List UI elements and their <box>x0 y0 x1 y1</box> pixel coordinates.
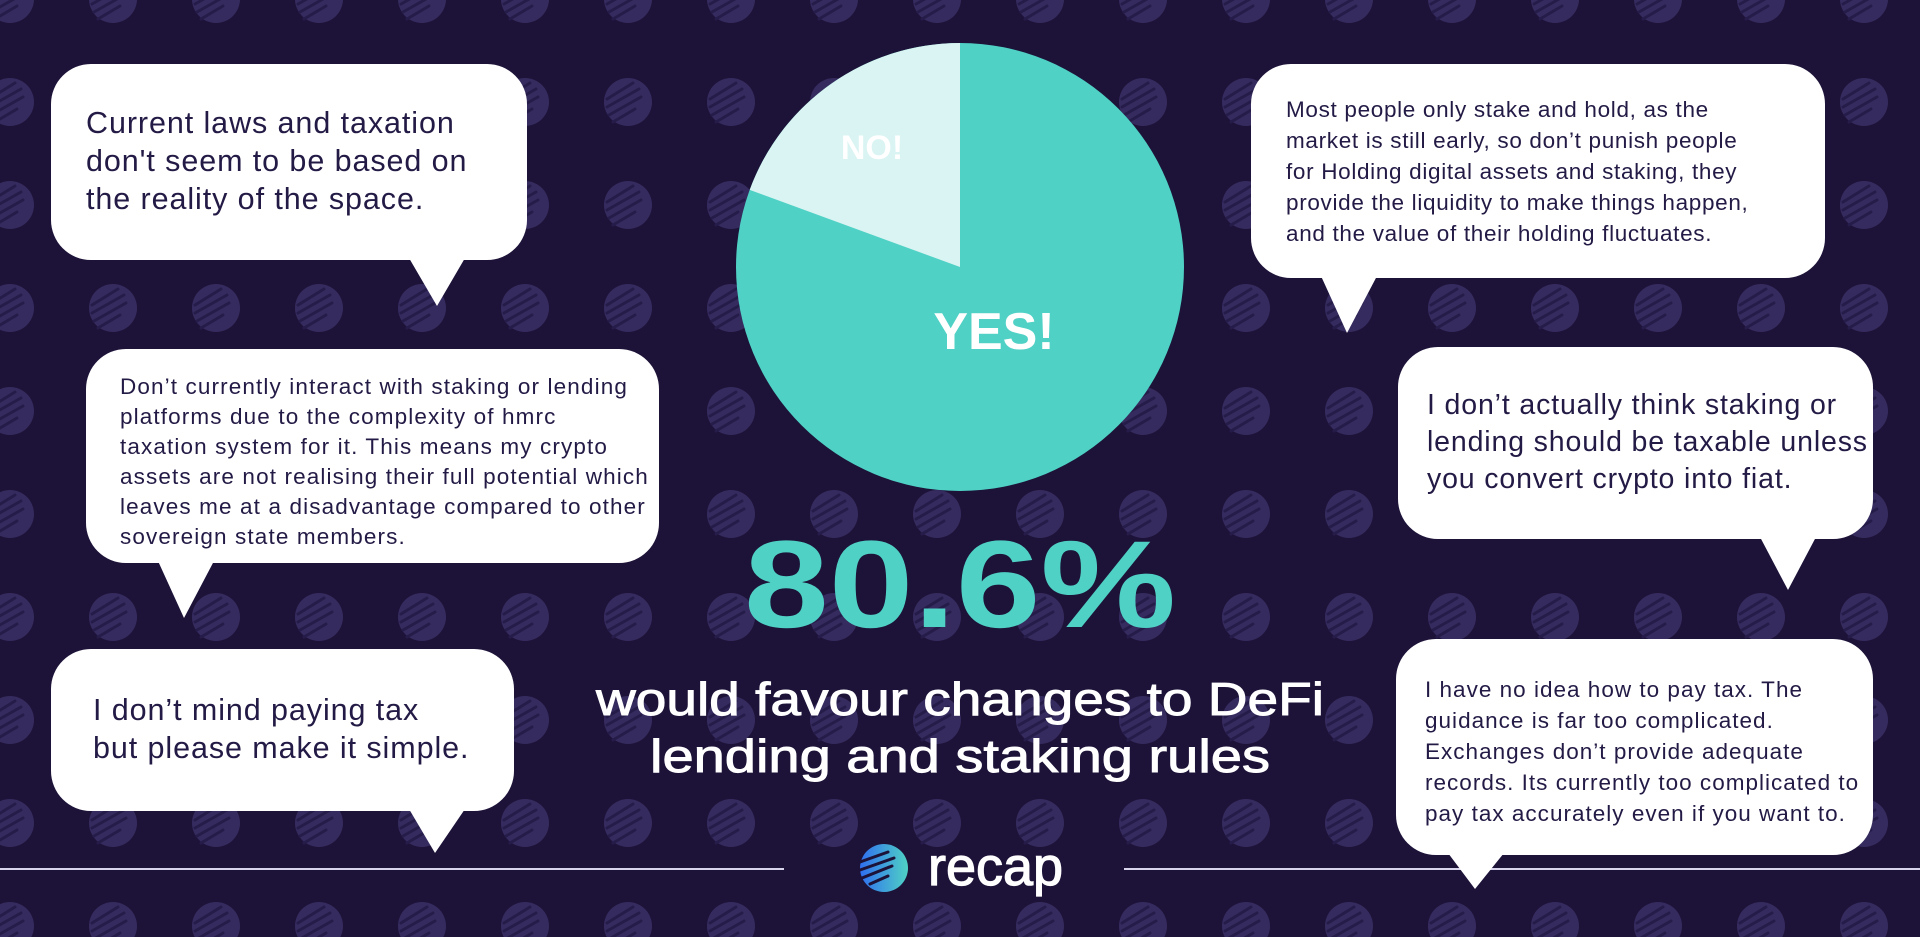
quote text: but please make it simple. <box>93 731 469 765</box>
logo text: recap <box>928 837 1063 897</box>
pie chart <box>736 43 1184 491</box>
quote text: taxation system for it. This means my crypto <box>120 434 608 459</box>
bubble: stake and hold <box>1251 64 1825 333</box>
quote text: you convert crypto into fiat. <box>1427 463 1792 495</box>
quote text <box>93 693 469 765</box>
quote text: Most people only stake and hold, as the <box>1286 97 1709 122</box>
bubble: not taxable unless fiat <box>1398 347 1873 590</box>
quote text: I don’t mind paying tax <box>93 693 419 727</box>
label: no: NO! <box>841 129 903 167</box>
bubble: current laws <box>51 64 527 306</box>
bubble: don't mind paying tax <box>51 649 514 853</box>
quote text: and the value of their holding fluctuates. <box>1286 221 1712 246</box>
quote text <box>1286 97 1748 246</box>
quote text: sovereign state members. <box>120 524 406 549</box>
quote text: don't seem to be based on <box>86 144 467 178</box>
quote text: the reality of the space. <box>86 182 424 216</box>
quote text: leaves me at a disadvantage compared to other <box>120 494 646 519</box>
quote text: lending should be taxable unless <box>1427 426 1868 458</box>
bubble: no idea how to pay tax <box>1396 639 1873 889</box>
quote text: assets are not realising their full potential which <box>120 464 649 489</box>
quote text: Current laws and taxation <box>86 106 455 140</box>
quote text: I have no idea how to pay tax. The <box>1425 677 1803 702</box>
quote text <box>120 374 649 549</box>
quote text: guidance is far too complicated. <box>1425 708 1774 733</box>
quote text <box>86 106 467 216</box>
subtitle: lending and staking rules <box>650 730 1270 782</box>
subtitle: would favour changes to DeFi <box>595 673 1324 725</box>
pie slice: yes <box>736 43 1184 491</box>
label: yes: YES! <box>933 303 1055 361</box>
quote text: provide the liquidity to make things happen, <box>1286 190 1748 215</box>
logo: recap <box>860 837 1063 897</box>
quote text: I don’t actually think staking or <box>1427 389 1837 421</box>
quote text <box>1427 389 1868 495</box>
subtitle <box>595 673 1324 782</box>
pie slice: no <box>750 43 960 267</box>
quote text: platforms due to the complexity of hmrc <box>120 404 557 429</box>
quote text: records. Its currently too complicated to <box>1425 770 1859 795</box>
quote text: Exchanges don’t provide adequate <box>1425 739 1804 764</box>
quote text: for Holding digital assets and staking, they <box>1286 159 1737 184</box>
icon: recap circle <box>860 844 908 892</box>
bubble: don't currently interact <box>86 349 659 618</box>
quote text: Don’t currently interact with staking or lending <box>120 374 628 399</box>
quote text: pay tax accurately even if you want to. <box>1425 801 1846 826</box>
quote text: market is still early, so don’t punish people <box>1286 128 1737 153</box>
quote text <box>1425 677 1859 826</box>
